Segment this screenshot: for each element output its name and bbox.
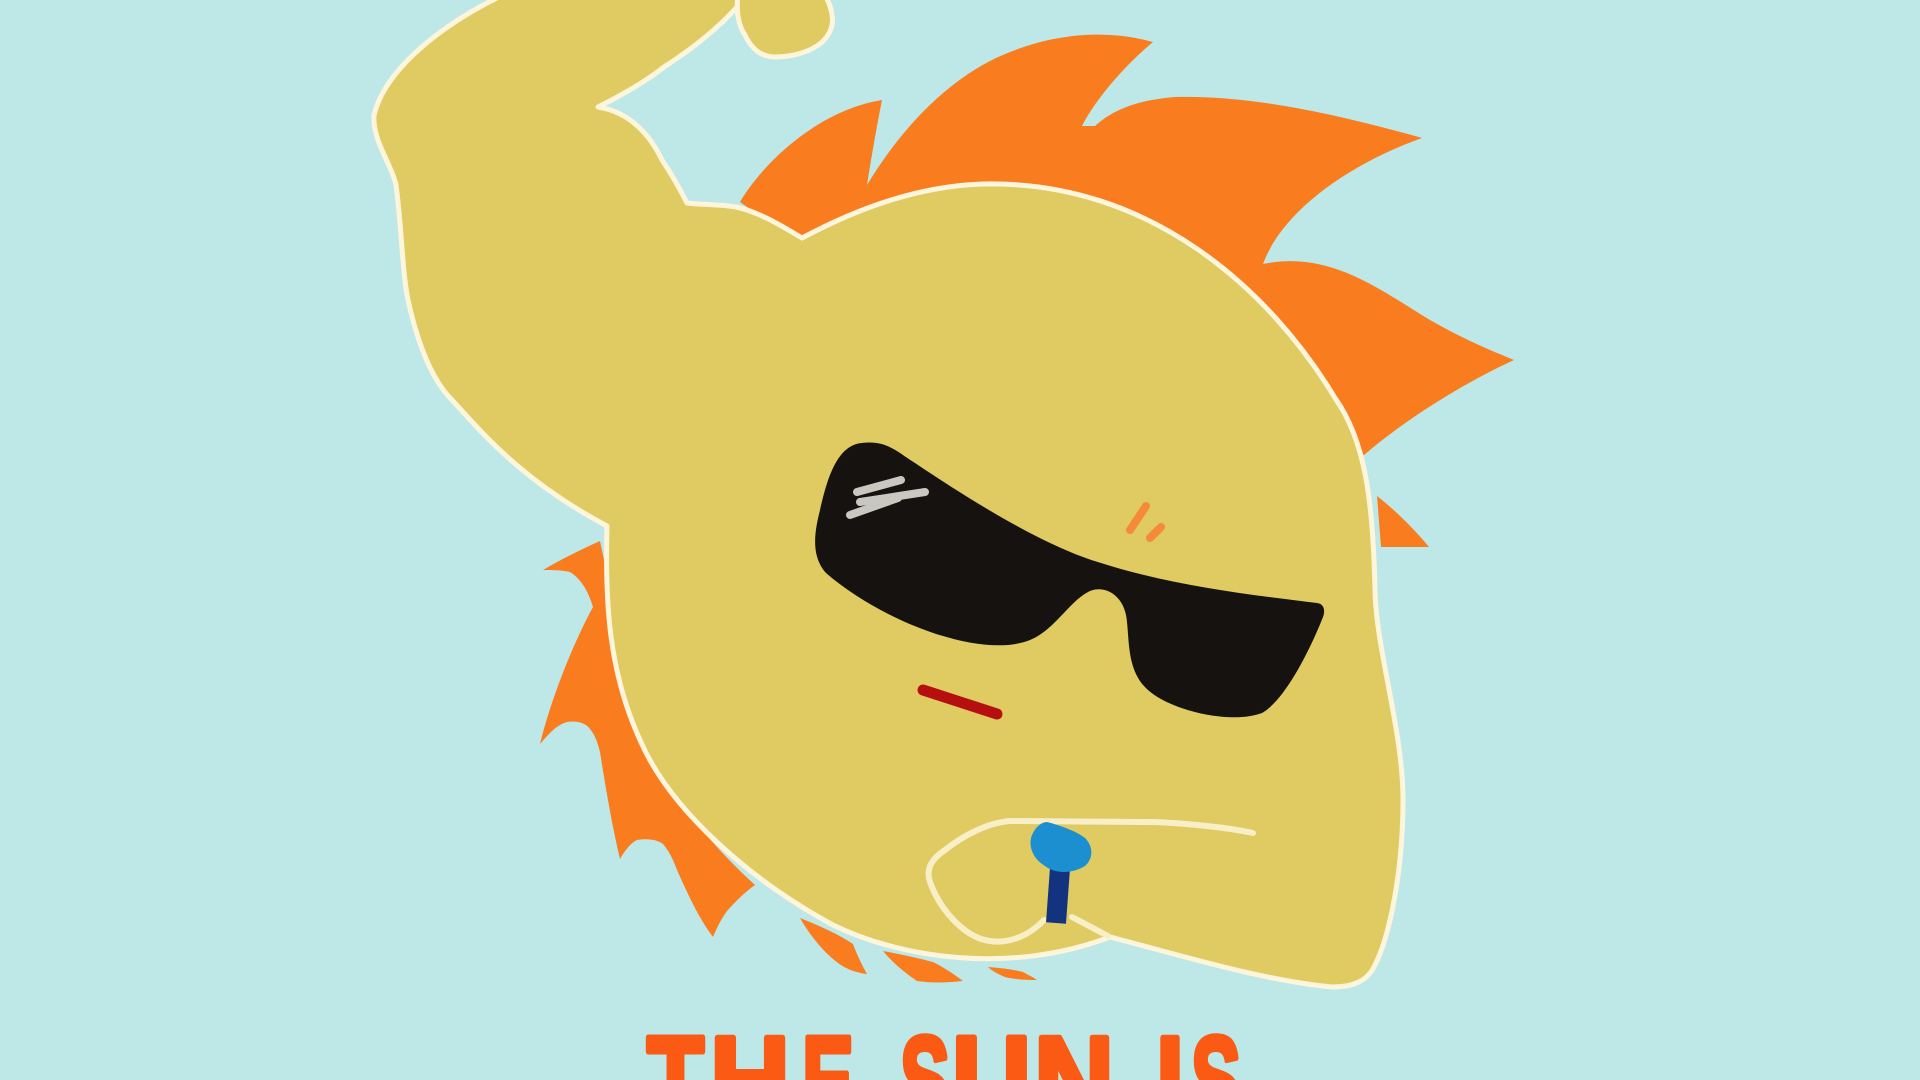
sunglasses (815, 442, 1324, 717)
pendant bead (1031, 822, 1091, 872)
fist thumb (737, 0, 833, 57)
sun hair: small lower flames (800, 918, 1037, 982)
sun hair: small right spike (1377, 496, 1429, 547)
mouth (923, 690, 997, 714)
sunglasses glare (850, 480, 925, 515)
sun body with flexed arm (374, 0, 1403, 987)
forehead sweat marks (1130, 506, 1161, 538)
necklace cord (929, 821, 1253, 942)
sun hair: upper spikes (740, 35, 1514, 455)
sun hair: lower left spikes (540, 541, 755, 937)
pendant stem (1056, 868, 1060, 923)
cord tail (1072, 917, 1108, 936)
necklace with blue pendant (929, 821, 1253, 942)
